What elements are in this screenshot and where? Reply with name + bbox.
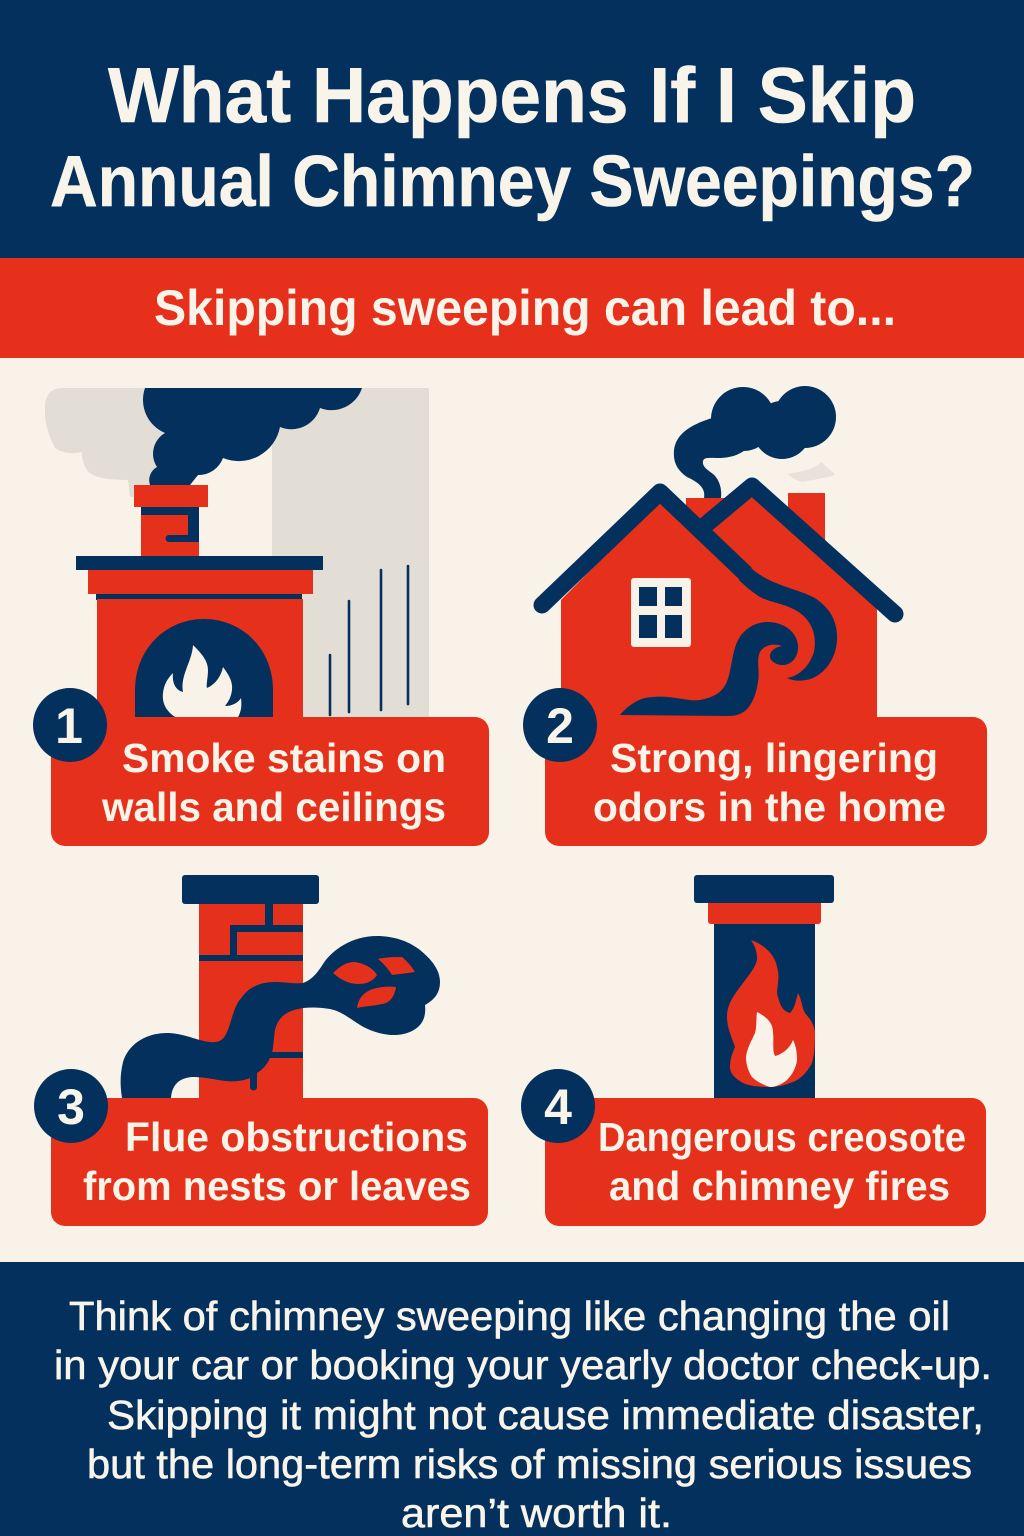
icon: dark smoke cloud <box>143 388 362 485</box>
number badge 3: 3 <box>57 1079 85 1135</box>
label card 3: from nests or leaves <box>83 1163 471 1209</box>
icon: house smoke cloud <box>674 386 836 498</box>
label card 3: Flue obstructions <box>125 1114 468 1160</box>
icon: fireplace chimney <box>76 485 323 719</box>
label card 1: Smoke stains on <box>122 735 446 781</box>
panel: title banner <box>0 0 1024 258</box>
number badge 4 <box>521 1069 595 1143</box>
panel: item 4 creosote fires <box>521 875 986 1226</box>
label card 4: and chimney fires <box>609 1163 950 1209</box>
label card 4: Dangerous creosote <box>598 1114 966 1160</box>
panel: item 3 flue obstructions <box>34 875 488 1226</box>
label card 1: walls and ceilings <box>101 784 446 830</box>
icon: grey smoke stain <box>45 388 429 718</box>
footer text: Skipping it might not cause immediate disaster, <box>107 1392 984 1438</box>
label card 2 <box>545 717 987 846</box>
icon: house <box>542 486 895 719</box>
footer text: but the long-term risks of missing serious issues <box>87 1441 972 1487</box>
number badge 4: 4 <box>544 1079 572 1135</box>
icon: grey wisp <box>787 462 835 482</box>
icon: flue chimney <box>694 875 834 1100</box>
panel: subtitle banner <box>0 258 1024 358</box>
icon: brick chimney <box>182 875 319 1100</box>
icon: soot streaks <box>330 566 408 715</box>
number badge 2 <box>523 688 597 762</box>
footer text: Think of chimney sweeping like changing the oil <box>69 1293 950 1339</box>
label card 2: Strong, lingering <box>610 735 938 781</box>
label card 4 <box>545 1098 986 1226</box>
icon: blockage smoke <box>121 936 440 1098</box>
panel: item 2 lingering odors <box>523 386 987 846</box>
icon: odor swirl <box>620 568 837 716</box>
label card 1 <box>51 717 489 846</box>
number badge 1 <box>33 688 107 762</box>
title line 1: What Happens If I Skip <box>108 51 916 139</box>
footer text: in your car or booking your yearly doctor check-up. <box>54 1342 992 1388</box>
label card 2: odors in the home <box>593 784 946 830</box>
icon: window <box>631 578 691 647</box>
footer text <box>54 1293 992 1536</box>
panel: footer message <box>0 1262 1024 1536</box>
panel: item 1 smoke stains <box>33 388 489 846</box>
icon: leaves <box>333 957 415 1008</box>
label card 3 <box>51 1098 488 1226</box>
number badge 1: 1 <box>55 698 83 754</box>
number badge 2: 2 <box>546 698 574 754</box>
icon: fire <box>727 940 815 1087</box>
subtitle: Skipping sweeping can lead to... <box>154 280 896 336</box>
number badge 3 <box>34 1069 108 1143</box>
footer text: aren’t worth it. <box>401 1490 672 1536</box>
